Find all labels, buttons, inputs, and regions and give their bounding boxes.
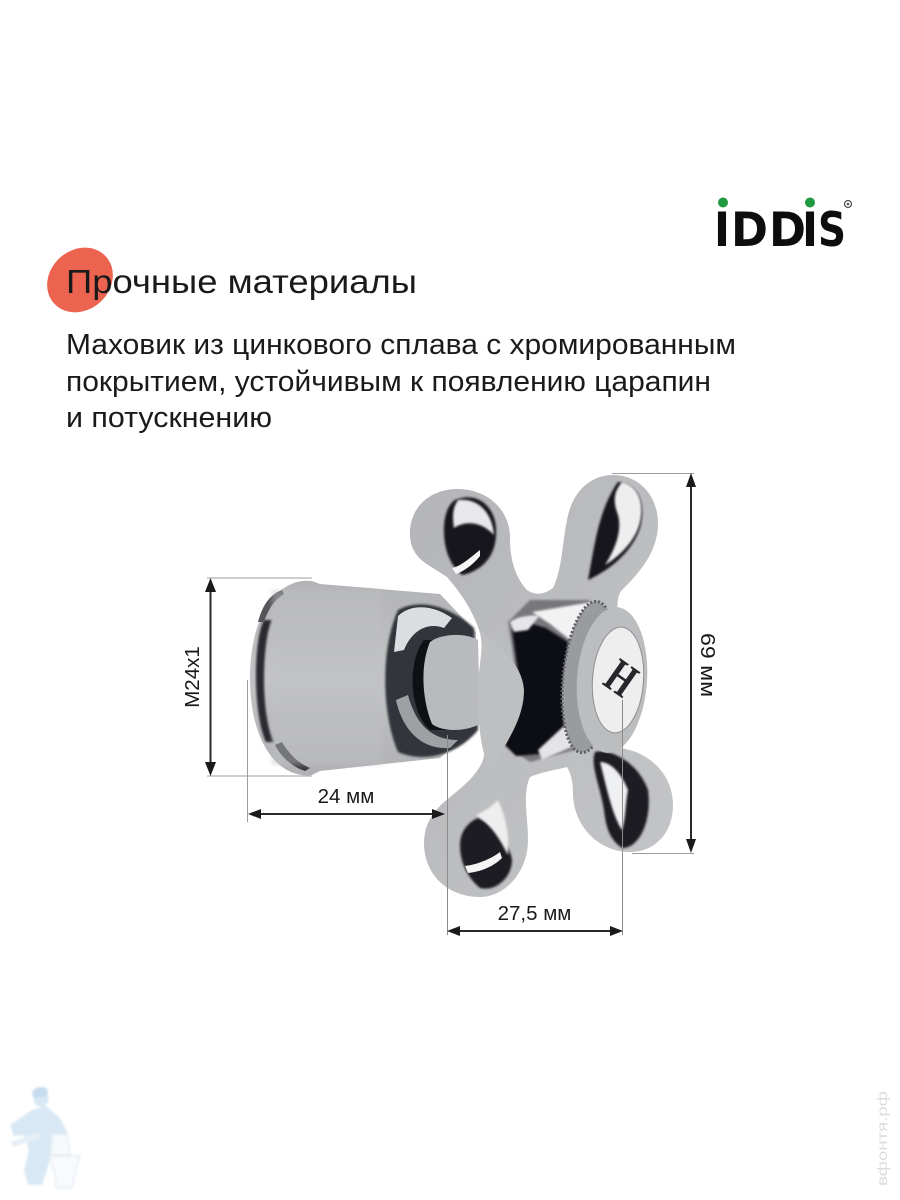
product: chrome cross handle valve <box>250 475 673 897</box>
description text: покрытием, устойчивым к появлению царапин <box>66 366 711 398</box>
bottom-right head <box>594 751 649 848</box>
cap letter H: H <box>595 648 647 707</box>
watermark text: вфонтя.рф <box>874 1091 890 1186</box>
dimension: M24x1 <box>181 578 312 776</box>
dimension: 69 мм <box>612 473 719 854</box>
knurled ring <box>555 599 623 755</box>
collar rings <box>385 604 480 757</box>
heading accent: red blob <box>34 234 126 326</box>
logo: IDDIS: D <box>769 203 806 258</box>
description text <box>66 329 736 434</box>
dimension: 27,5 мм: 27,5 мм <box>498 902 571 925</box>
dimension: 24 мм: 24 мм <box>318 785 374 808</box>
dark hub <box>478 600 592 770</box>
cap <box>572 605 652 755</box>
cross body silhouette <box>410 475 673 897</box>
dimension: 69 мм: 69 мм <box>696 633 719 697</box>
description text: и потускнению <box>66 402 272 434</box>
dimension: 27,5 мм <box>447 700 623 936</box>
cylinder base <box>250 581 476 775</box>
logo: IDDIS: D <box>731 203 768 258</box>
top-left head <box>444 497 496 575</box>
logo: IDDIS: I <box>802 203 818 258</box>
watermark icon: plumber with toilet <box>10 1087 80 1188</box>
logo: IDDIS: I <box>714 203 730 258</box>
dimension: 24 мм <box>248 680 445 822</box>
top-right head <box>588 482 642 580</box>
description text: Маховик из цинкового сплава с хромированным <box>66 329 736 361</box>
white cap insert <box>589 625 647 735</box>
logo: IDDIS: S <box>818 203 846 258</box>
heading: Прочные материалы <box>66 263 417 300</box>
dimension: M24x1: M24x1 <box>181 646 204 708</box>
bottom-left head <box>460 800 512 889</box>
logo: IDDIS <box>714 198 852 258</box>
